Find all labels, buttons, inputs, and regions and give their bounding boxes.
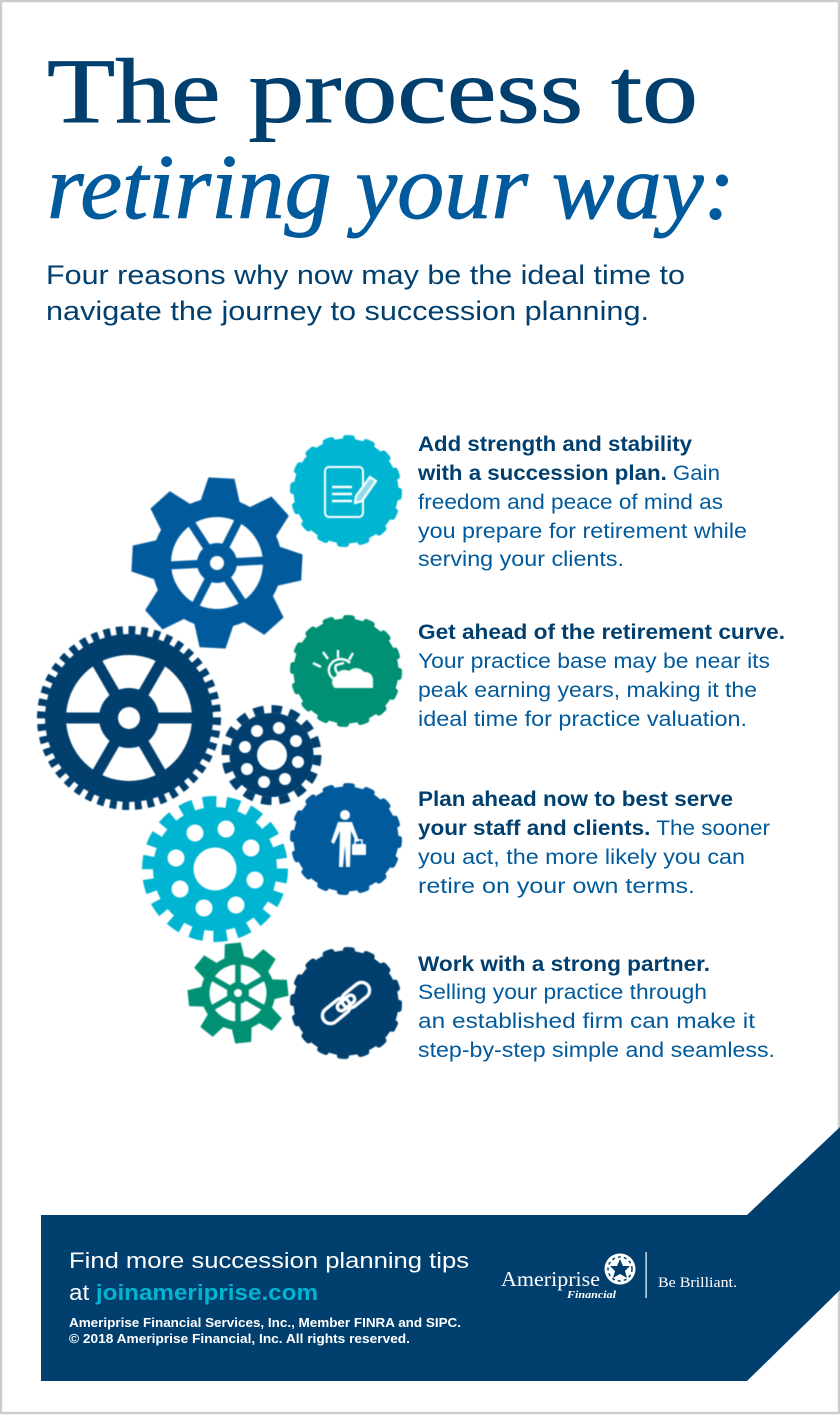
text block: staff and clients: Plan ahead now to best serve (418, 788, 733, 811)
title: retiring your way: (47, 136, 735, 238)
text block: retirement curve: peak earning years, making it the (418, 679, 757, 702)
footer legal text (69, 1316, 461, 1346)
logo: Ameriprise Financial Be Brilliant (501, 1252, 737, 1301)
text block: succession plan: serving your clients. (418, 548, 624, 571)
badge: businessperson icon (293, 786, 399, 892)
gear: medium blue eight-tooth (128, 474, 306, 652)
footer legal text: Ameriprise Financial Services, Inc., Member FINRA and SIPC. (69, 1316, 461, 1330)
footer banner (41, 1127, 840, 1381)
subtitle: Four reasons why now may be the ideal time to (46, 260, 685, 290)
text block: succession plan: with a succession plan. Gain (417, 462, 720, 485)
title: The process to (47, 40, 698, 142)
gear: cyan with holes (148, 802, 282, 936)
badge: document and pencil icon (293, 438, 399, 544)
footer call to action (69, 1248, 469, 1305)
text block: staff and clients: you act, the more likely you can (418, 846, 745, 869)
text block: succession plan: freedom and peace of mind as (418, 491, 723, 514)
text block: retirement curve: Your practice base may be near its (418, 650, 770, 673)
gear: small navy with holes (226, 709, 318, 801)
text block: retirement curve (418, 621, 785, 731)
text block: strong partner: Selling your practice through (418, 981, 707, 1004)
text block: strong partner (418, 953, 775, 1062)
logo: Ameriprise Financial Be Brilliant: Financial (566, 1289, 617, 1301)
text block: succession plan: you prepare for retirement while (418, 520, 747, 543)
footer legal text: © 2018 Ameriprise Financial, Inc. All rights reserved. (69, 1332, 410, 1346)
text block: retirement curve: ideal time for practice valuation. (418, 708, 747, 731)
text block: strong partner: Work with a strong partner. (418, 953, 710, 976)
text block: succession plan: Add strength and stability (418, 433, 692, 456)
subtitle: navigate the journey to succession planning. (46, 296, 649, 326)
footer call to action: at joinameriprise.com (69, 1280, 318, 1305)
text block: retirement curve: Get ahead of the retirement curve. (418, 621, 785, 644)
text block: staff and clients: your staff and clients. The sooner (418, 817, 770, 840)
footer call to action: Find more succession planning tips (69, 1248, 469, 1273)
gear: large navy fine-tooth (42, 630, 216, 806)
title (47, 40, 735, 238)
badge: chain link icon (293, 950, 399, 1056)
gear: green eight-tooth (183, 938, 293, 1048)
text block: staff and clients: retire on your own terms. (418, 875, 695, 898)
text block: strong partner: step-by-step simple and seamless. (418, 1039, 775, 1062)
text block: strong partner: an established firm can make it (418, 1010, 755, 1033)
logo: Ameriprise Financial Be Brilliant: Ameriprise (501, 1267, 600, 1291)
text block: succession plan (417, 433, 747, 571)
logo: Ameriprise Financial Be Brilliant: Be Brilliant. (658, 1275, 737, 1291)
badge: sun and cloud icon (293, 618, 399, 724)
text block: staff and clients (418, 788, 770, 898)
subtitle (46, 260, 685, 326)
